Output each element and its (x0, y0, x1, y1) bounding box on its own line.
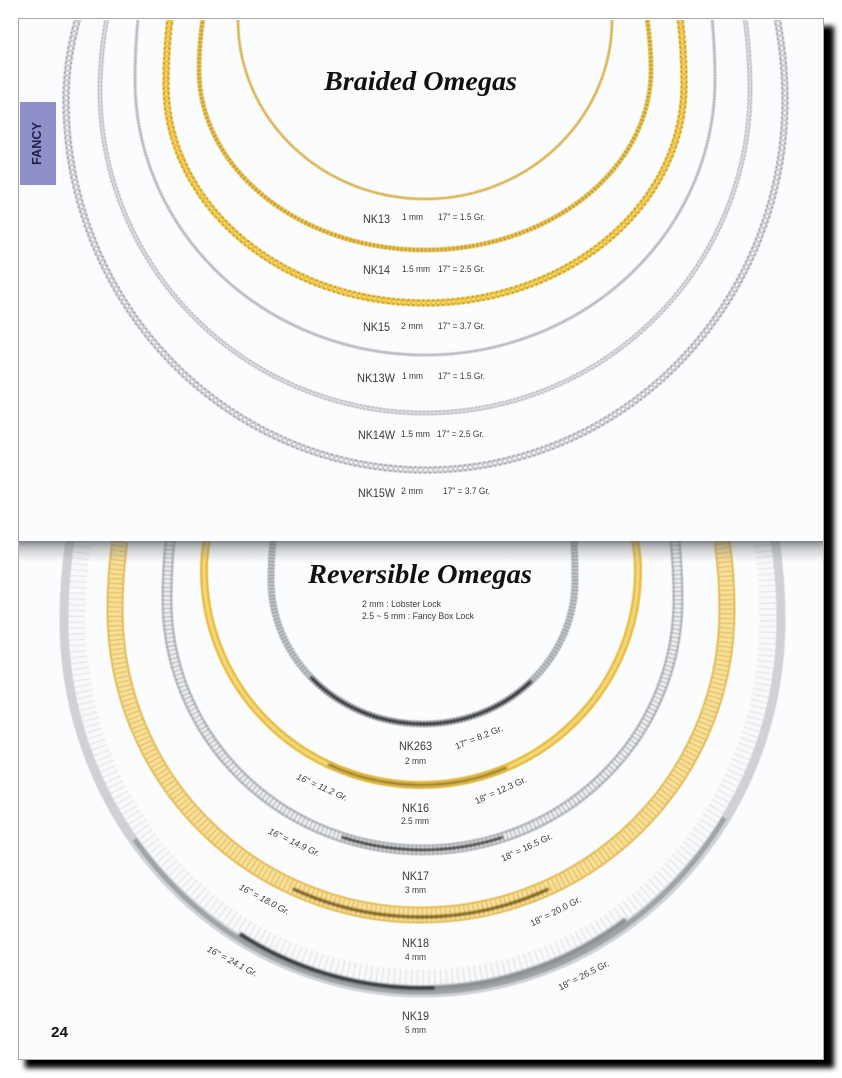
label: NK13W: 1 mm (402, 371, 423, 381)
ring: NK18 gold (115, 541, 727, 915)
label: NK13W: NK13W (357, 371, 396, 385)
label: NK17: NK17 (402, 869, 429, 883)
chain: NK14W silver (100, 18, 750, 413)
label: NK15: 17" = 3.7 Gr. (438, 321, 485, 331)
label: NK13W: 17" = 1.5 Gr. (438, 371, 485, 381)
chain: NK13 gold (238, 18, 612, 199)
label: NK17 (402, 869, 429, 895)
label: NK14W: 1.5 mm (401, 429, 430, 439)
label: NK19: NK19 (402, 1009, 429, 1023)
ring: NK17 dark highlight (340, 834, 505, 853)
label: NK17: 3 mm (405, 885, 426, 895)
tab: FANCY: FANCY (29, 122, 44, 165)
panel: reversible omegas (19, 541, 823, 1035)
label: NK263: NK263 (399, 739, 432, 753)
label: NK263: 2 mm (405, 756, 426, 766)
ring: NK19 silver (66, 541, 779, 992)
heading: Reversible Omegas: Reversible Omegas (307, 559, 532, 589)
label: NK16: NK16 (402, 801, 429, 815)
label: NK15: NK15 (363, 320, 390, 334)
weight: 16 inch 24.1: 16" = 24.1 Gr. (205, 944, 259, 979)
label: NK15W: NK15W (358, 486, 396, 500)
weight: 16 inch 14.9: 16" = 14.9 Gr. (267, 826, 322, 859)
ring: NK18 dark highlight (291, 886, 550, 920)
fold shadow (19, 541, 823, 562)
label: NK13W (357, 371, 485, 385)
weight: 18 inch 26.5: 18" = 26.5 Gr. (557, 958, 611, 992)
ring: NK263 dark highlight (308, 675, 534, 727)
label: NK19: 5 mm (405, 1025, 426, 1035)
label: NK14W (358, 428, 484, 442)
label: NK15W: 2 mm (401, 486, 423, 496)
weight: 18 inch 20.0: 18" = 20.0 Gr. (529, 894, 583, 928)
label: NK14: NK14 (363, 263, 390, 277)
label: NK15W (358, 486, 490, 500)
label: NK14W: 17" = 2.5 Gr. (437, 429, 484, 439)
ring: NK16 gold (204, 541, 638, 785)
label: NK15 (363, 320, 485, 334)
weight: 17 inch 8.2: 17" = 8.2 Gr. (454, 723, 504, 751)
ring: NK263 silver (271, 541, 575, 724)
chain: NK13W silver (135, 18, 715, 355)
label: NK13: NK13 (363, 212, 390, 226)
label: NK16 (401, 801, 429, 826)
label: NK13: 17" = 1.5 Gr. (438, 212, 485, 222)
label: NK13 (363, 212, 485, 226)
label: NK18 (402, 936, 429, 962)
label: NK14: 1.5 mm (402, 264, 430, 274)
note: lock types: 2.5 ~ 5 mm : Fancy Box Lock (362, 611, 474, 621)
ring: NK19 dark highlight (238, 916, 628, 992)
label: NK19 (402, 1009, 429, 1035)
label: NK16: 2.5 mm (401, 816, 429, 826)
ring: NK16 dark highlight (326, 762, 508, 788)
heading: Braided Omegas: Braided Omegas (323, 66, 517, 96)
label: NK263 (399, 739, 432, 766)
weight: 18 inch 16.5: 18" = 16.5 Gr. (499, 831, 554, 864)
chain: NK14 gold (199, 18, 651, 250)
label: NK13: 1 mm (402, 212, 423, 222)
necklaces: reversible rings (66, 541, 779, 992)
chain: NK15W silver (66, 18, 785, 470)
tab: FANCY (20, 102, 56, 185)
label: NK14: 17" = 2.5 Gr. (438, 264, 485, 274)
necklaces: braided chains (66, 18, 785, 470)
label: NK15: 2 mm (401, 321, 423, 331)
weight: 18 inch 12.3: 18" = 12.3 Gr. (473, 774, 528, 806)
page number: 24 (51, 1024, 69, 1041)
label: NK15W: 17" = 3.7 Gr. (443, 486, 490, 496)
label: NK18: 4 mm (405, 952, 426, 962)
note: lock types: 2 mm : Lobster Lock (362, 599, 441, 609)
weight: 16 inch 18.0: 16" = 18.0 Gr. (237, 882, 291, 917)
label: NK18: NK18 (402, 936, 429, 950)
weight: 16 inch 11.2: 16" = 11.2 Gr. (295, 772, 349, 803)
label: NK14W: NK14W (358, 428, 396, 442)
panel: braided omegas (66, 18, 785, 500)
label: NK14 (363, 263, 485, 277)
chain: NK15 gold (166, 18, 684, 303)
note: lock types (362, 599, 474, 621)
ring: NK17 silver (167, 541, 678, 850)
